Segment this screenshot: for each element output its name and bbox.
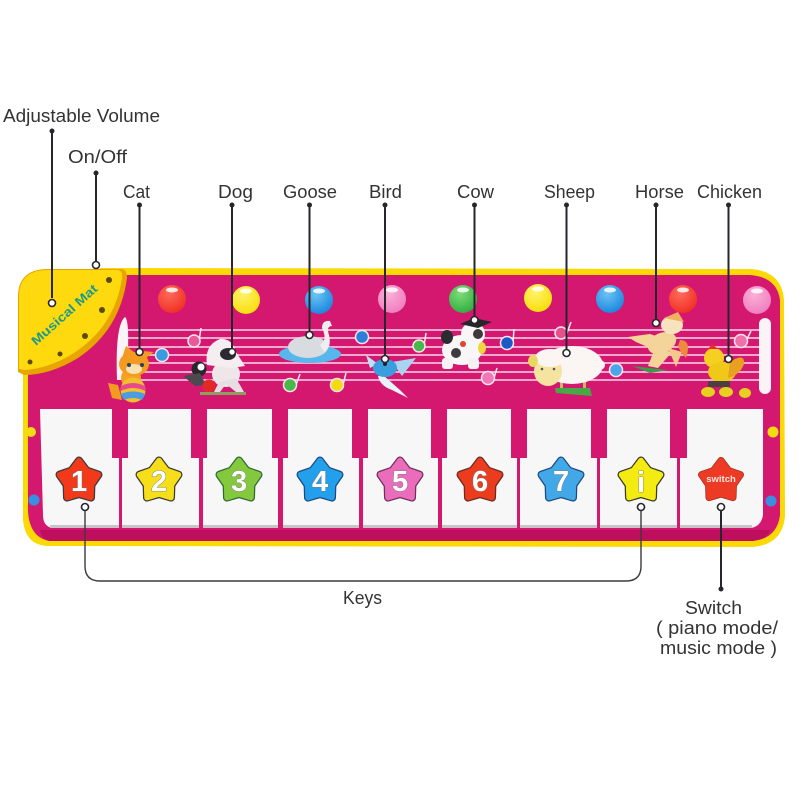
label: dog: Dog [218,182,253,202]
star 1 [60,460,98,498]
white side bars [117,317,771,394]
labels [3,106,778,658]
mat body [23,268,785,547]
chicken [701,344,751,398]
dog [183,339,246,395]
control panel [18,269,127,375]
leader: dog [228,202,236,356]
white piano keys [40,409,763,528]
label: chicken: Chicken [697,182,762,202]
panel label: Musical Mat: Musical Mat [29,281,101,348]
star 8: i [637,467,645,499]
leader: cow [471,202,478,324]
star 5 [380,460,420,498]
star 5: 5 [392,466,408,498]
label: sheep: Sheep [544,182,595,202]
star 7 [542,460,580,498]
star 4: 4 [312,466,328,498]
label: cow: Cow [457,182,495,202]
leader: on/off [92,170,100,268]
leader: horse [652,202,660,326]
label: goose: Goose [283,182,337,202]
label: music mode: music mode ) [660,638,777,658]
star 3: 3 [231,466,247,498]
star 6 [460,460,500,498]
star 2 [140,460,178,498]
star 2: 2 [151,466,167,498]
small music notes [26,322,778,506]
star switch [702,460,740,498]
star 6: 6 [472,466,488,498]
cow [441,318,492,369]
label: switch: Switch [685,598,742,618]
sheep [528,346,605,396]
leader: adjustable volume [48,128,56,306]
star 7: 7 [553,466,569,498]
star keys [60,460,740,499]
callouts: leader lines [48,128,732,592]
label: adjustable volume: Adjustable Volume [3,106,160,126]
star 3 [220,460,258,498]
staff lines [127,330,760,380]
leader: chicken [725,202,732,362]
goose [279,321,341,363]
key bottom shadow [50,525,752,528]
leader: bird [382,202,388,362]
leader: sheep [563,202,570,356]
star 8 [622,460,660,499]
coloured balls row [158,284,771,314]
bracket: keys [82,504,644,581]
cat [108,346,154,402]
label: on/off: On/Off [68,147,128,167]
leader: switch [718,504,724,592]
label: keys: Keys [343,588,382,608]
panel notes [28,277,112,364]
label: piano mode: ( piano mode/ [656,618,778,638]
star switch: switch [706,474,736,485]
label: bird: Bird [369,182,402,202]
star 4 [300,460,340,498]
leader: goose [306,202,313,338]
horse [628,312,688,373]
label: cat: Cat [123,182,150,202]
star 1: 1 [71,466,87,498]
bird [366,355,416,398]
label: horse: Horse [635,182,684,202]
leader: cat [136,202,143,356]
